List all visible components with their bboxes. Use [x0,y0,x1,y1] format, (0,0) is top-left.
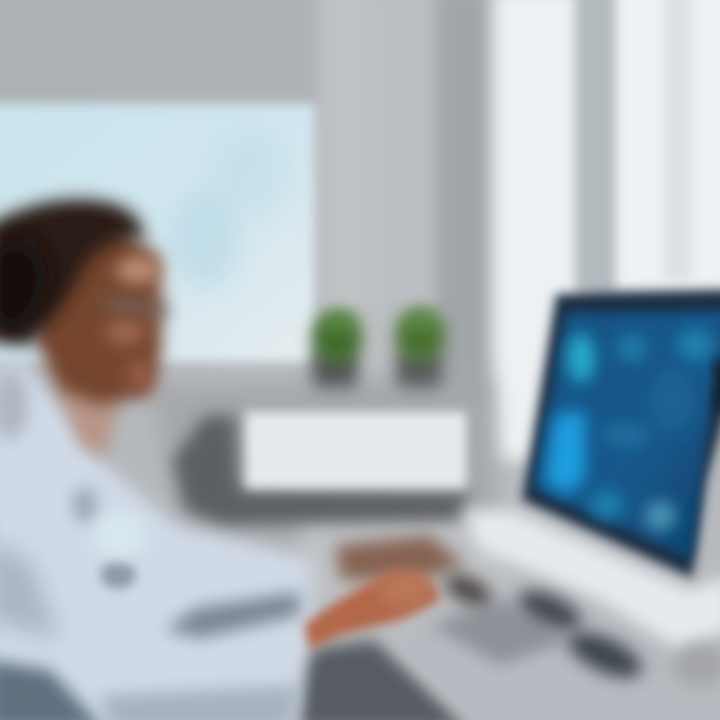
face [35,225,162,405]
coat shadows and folds [0,370,300,720]
monitor stand and white desk edge [462,510,720,650]
plant: right [395,310,445,388]
wall art panel [0,104,314,362]
lab coat [0,360,315,720]
white shelf [246,412,466,488]
hair [0,199,145,345]
forehead highlight [116,256,160,284]
person [0,199,315,720]
window with bright panes [494,0,720,460]
monitor frame [522,290,720,578]
screen highlight: tiles [591,329,713,531]
chin highlight [127,360,153,390]
desk surface [300,530,720,720]
screen highlight: cyan blocks [568,333,594,383]
dark cabinet area [150,375,500,545]
hand and forearm [304,535,496,650]
plant: left [312,312,362,388]
monitor screen [534,312,720,560]
keyboard [430,582,720,687]
dark right edge [714,360,720,410]
monitor [522,290,720,578]
glasses [100,296,168,320]
neck [55,380,120,460]
cheek highlight [105,320,145,344]
